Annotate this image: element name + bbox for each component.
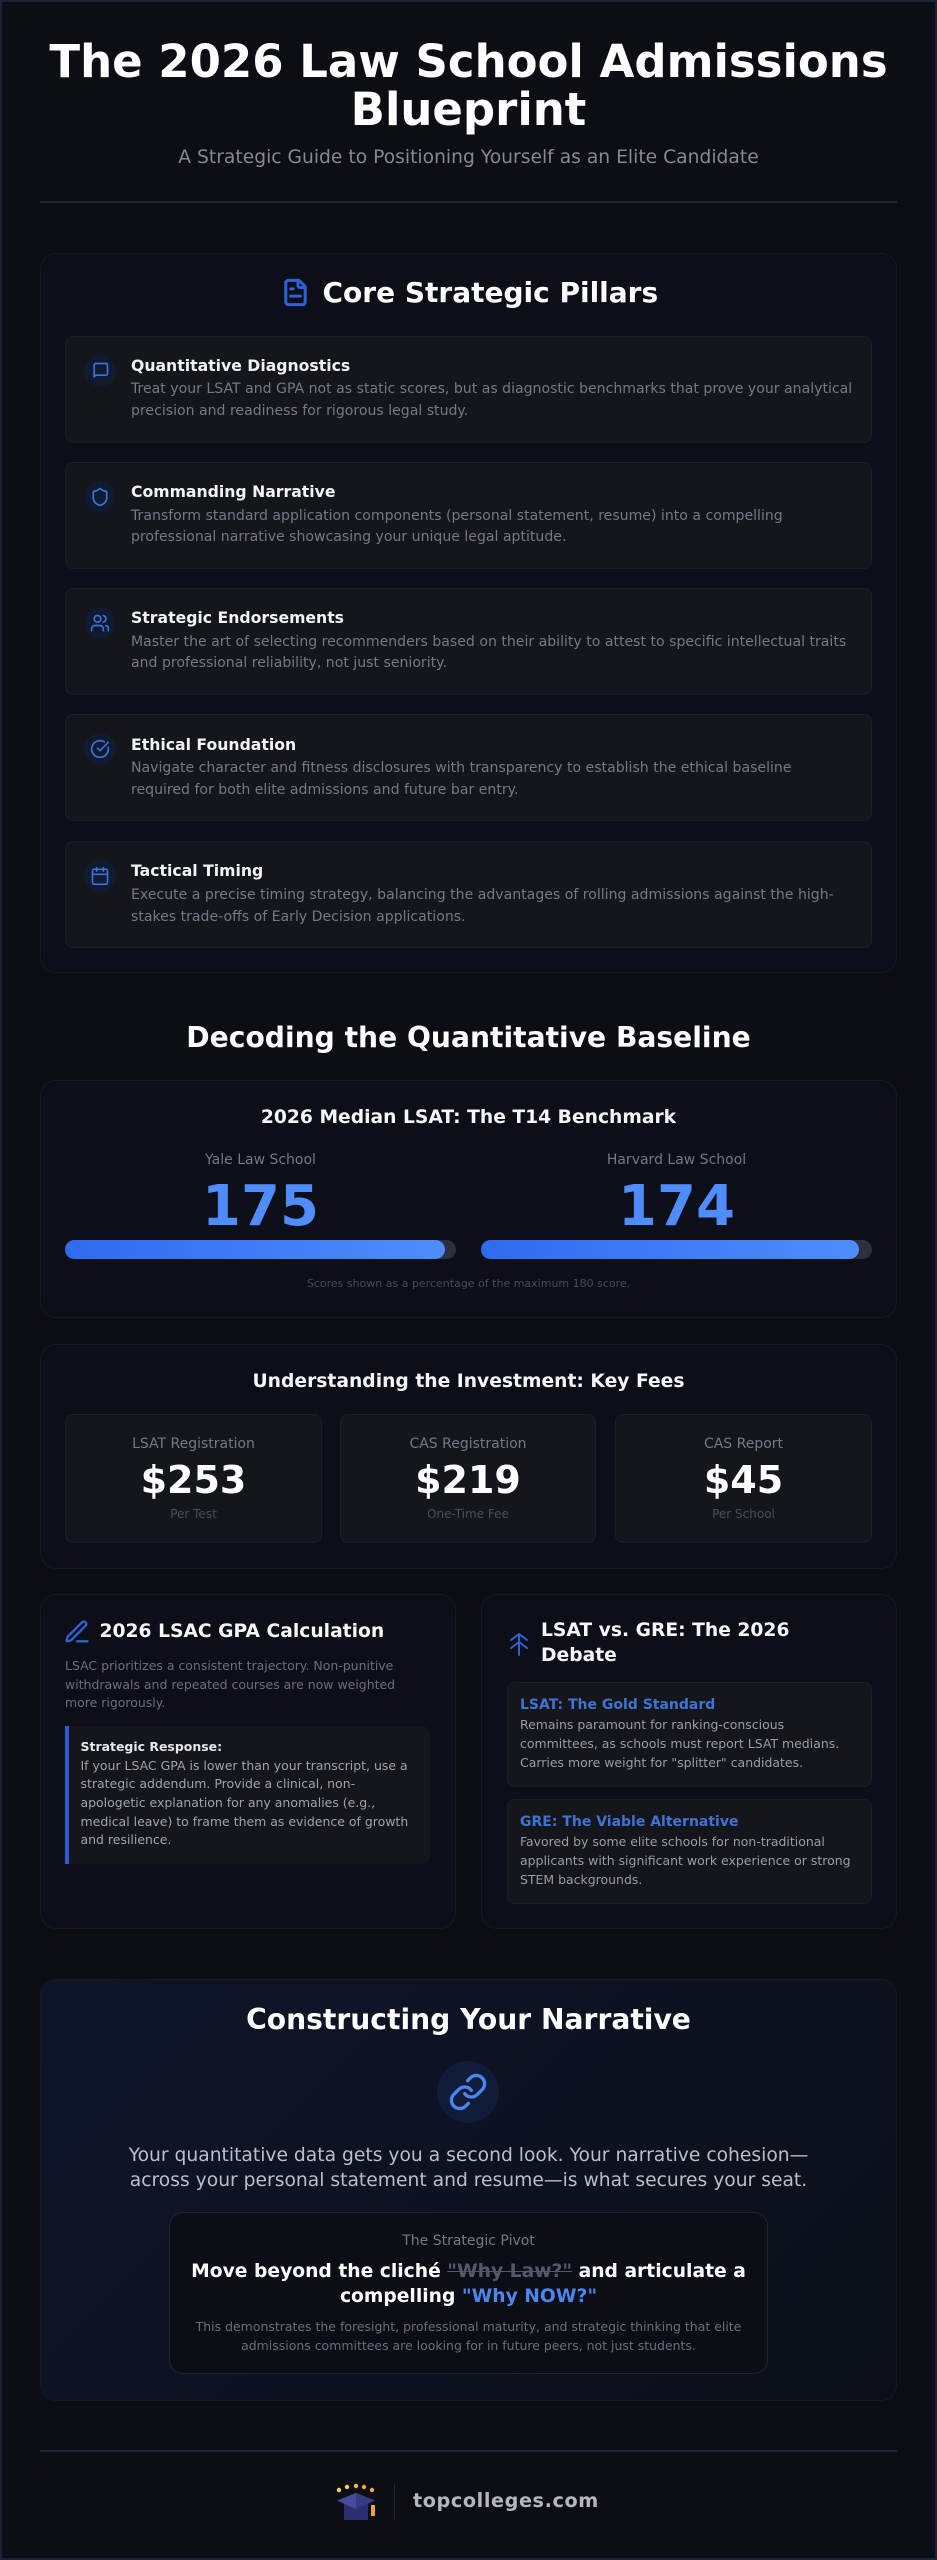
pillar heading: Quantitative Diagnostics [131,356,350,375]
heading: LSAT vs GRE [541,1620,789,1666]
pillar: commanding narrative [65,462,872,569]
label: yale: Yale Law School [205,1152,316,1168]
heading: GPA: 2026 LSAC GPA Calculation [100,1621,384,1642]
pillar heading: Commanding Narrative [131,482,336,501]
pillar description: Treat your LSAT and GPA not as static scores, but as diagnostic benchmarks that prove your analytical [131,381,852,397]
title [49,35,888,136]
panel: key fees [40,1344,897,1569]
footer brand: topcolleges.com [413,2489,599,2512]
card text: Remains paramount for ranking-conscious [520,1717,784,1732]
pillar description [131,634,846,671]
pillar description: precision and readiness for rigorous legal study. [131,403,468,419]
pillar description: and professional reliability, not just seniority. [131,655,447,671]
callout: strategic response [65,1726,430,1864]
label: harvard: Harvard Law School [607,1152,746,1168]
pillar heading: Ethical Foundation [131,735,296,754]
title: The 2026 Law School Admissions [49,35,888,88]
number: yale score: 175 [202,1174,319,1239]
heading: core strategic pillars: Core Strategic Pillars [322,276,658,309]
pillar: quantitative diagnostics [65,336,872,442]
pivot headline: compelling "Why NOW?" [340,2286,597,2307]
pivot headline [191,2261,746,2307]
pillar description: Execute a precise timing strategy, balancing the advantages of rolling admissions against the high- [131,887,834,903]
subtitle: A Strategic Guide to Positioning Yourself as an Elite Candidate [178,146,759,168]
panel: core strategic pillars [40,253,897,973]
text: narrative statement: Your quantitative data gets you a second look. Your narrative cohesion— [129,2145,808,2166]
text: GPA explanation [65,1658,395,1710]
icon: circle check [84,733,116,765]
card text [520,1717,839,1770]
card heading: LSAT: The Gold Standard [520,1697,715,1713]
callout text: strategic addendum. Provide a clinical, non- [80,1776,355,1791]
pillar description [131,508,783,545]
card text: applicants with significant work experience or strong [520,1853,851,1868]
card heading: GRE: The Viable Alternative [520,1814,738,1830]
fee amount: $219 [415,1458,521,1502]
card: GRE [507,1799,872,1904]
panel: constructing your narrative [40,1979,897,2401]
text: GPA explanation: more rigorously. [65,1695,165,1710]
fee amount: $45 [704,1458,783,1502]
heading: LSAT vs GRE: Debate [541,1645,617,1666]
icon: calendar [84,860,116,892]
card text: STEM backgrounds. [520,1872,642,1887]
number: harvard score: 174 [618,1174,735,1239]
text: GPA explanation: LSAC prioritizes a consistent trajectory. Non-punitive [65,1658,393,1673]
pivot label: The Strategic Pivot [402,2233,535,2249]
pillar description [131,381,852,419]
text: narrative statement [128,2145,808,2191]
pivot explanation [196,2319,741,2353]
panel: LSAC GPA calculation [40,1594,456,1929]
pillar: ethical foundation [65,714,872,821]
card text [520,1834,851,1887]
card text: committees, as schools must report LSAT medians. [520,1736,839,1751]
card text: Carries more weight for "splitter" candidates. [520,1755,803,1770]
pillar description: Master the art of selecting recommenders based on their ability to attest to specific intellectual traits [131,634,846,650]
card: LSAT [507,1682,872,1787]
pillar description: professional narrative showcasing your unique legal aptitude. [131,529,566,545]
pillar: strategic endorsements [65,588,872,695]
fee note: One-Time Fee [427,1507,509,1521]
icon: link [437,2061,499,2123]
callout text: Strategic Response: [80,1739,222,1754]
card text: Favored by some elite schools for non-traditional [520,1834,825,1849]
icon: users [84,607,116,639]
panel: median LSAT benchmark [40,1080,897,1318]
heading: key fees: Understanding the Investment: Key Fees [252,1371,684,1392]
callout text [80,1739,408,1847]
callout text: If your LSAC GPA is lower than your transcript, use a [80,1758,408,1773]
fee card: LSAT registration [65,1414,322,1543]
fee label: LSAT Registration [132,1436,255,1452]
fee amount: $253 [141,1458,246,1502]
pillar description [131,887,834,925]
heading: LSAT vs GRE: LSAT vs. GRE: The 2026 [541,1620,789,1641]
fee label: CAS Registration [409,1436,527,1452]
pillar heading: Tactical Timing [131,861,263,880]
fee card: CAS registration [340,1414,596,1543]
pillar description: required for both elite admissions and future bar entry. [131,782,518,798]
pillar heading: Strategic Endorsements [131,608,344,627]
footnote: Scores shown as a percentage of the maximum 180 score. [307,1277,630,1290]
text: GPA explanation: withdrawals and repeated courses are now weighted [65,1677,395,1692]
text: narrative statement: across your personal statement and resume—is what secures your seat. [130,2170,807,2191]
icon: pen [65,1620,89,1642]
title: Blueprint [351,82,586,136]
icon: shield [84,481,116,513]
bar: harvard [481,1240,872,1259]
icon: message square [84,354,116,386]
pivot explanation: This demonstrates the foresight, professional maturity, and strategic thinking that elite [196,2319,741,2334]
pillar description: Navigate character and fitness disclosures with transparency to establish the ethical baseline [131,760,792,776]
callout text: and resilience. [80,1832,171,1847]
callout text: medical leave) to frame them as evidence of growth [80,1814,408,1829]
panel: LSAT vs GRE [481,1594,897,1929]
icon: scale arrows [510,1633,528,1656]
bar: yale [65,1240,456,1259]
callout text: apologetic explanation for any anomalies (e.g., [80,1795,375,1810]
fee note: Per School [712,1507,775,1521]
fee note: Per Test [170,1507,217,1521]
chart heading: 2026 Median LSAT: The T14 Benchmark [261,1107,676,1128]
pillar description [131,760,792,798]
icon: file [284,278,307,306]
fee label: CAS Report [704,1436,783,1452]
fee card: CAS report [615,1414,872,1543]
pillar description: stakes trade-offs of Early Decision applications. [131,909,466,925]
pillar description: Transform standard application components (personal statement, resume) into a compelling [131,508,783,524]
heading: decoding the quantitative baseline: Decoding the Quantitative Baseline [186,1021,751,1054]
pillar: tactical timing [65,841,872,948]
pivot headline: Move beyond the cliché "Why Law?" and articulate a [191,2261,746,2282]
heading: narrative: Constructing Your Narrative [246,2003,691,2036]
callout: strategic pivot [169,2212,768,2374]
icon: topcolleges logo [336,2484,375,2520]
pivot explanation: admissions committees are looking for in future peers, not just students. [241,2338,696,2353]
